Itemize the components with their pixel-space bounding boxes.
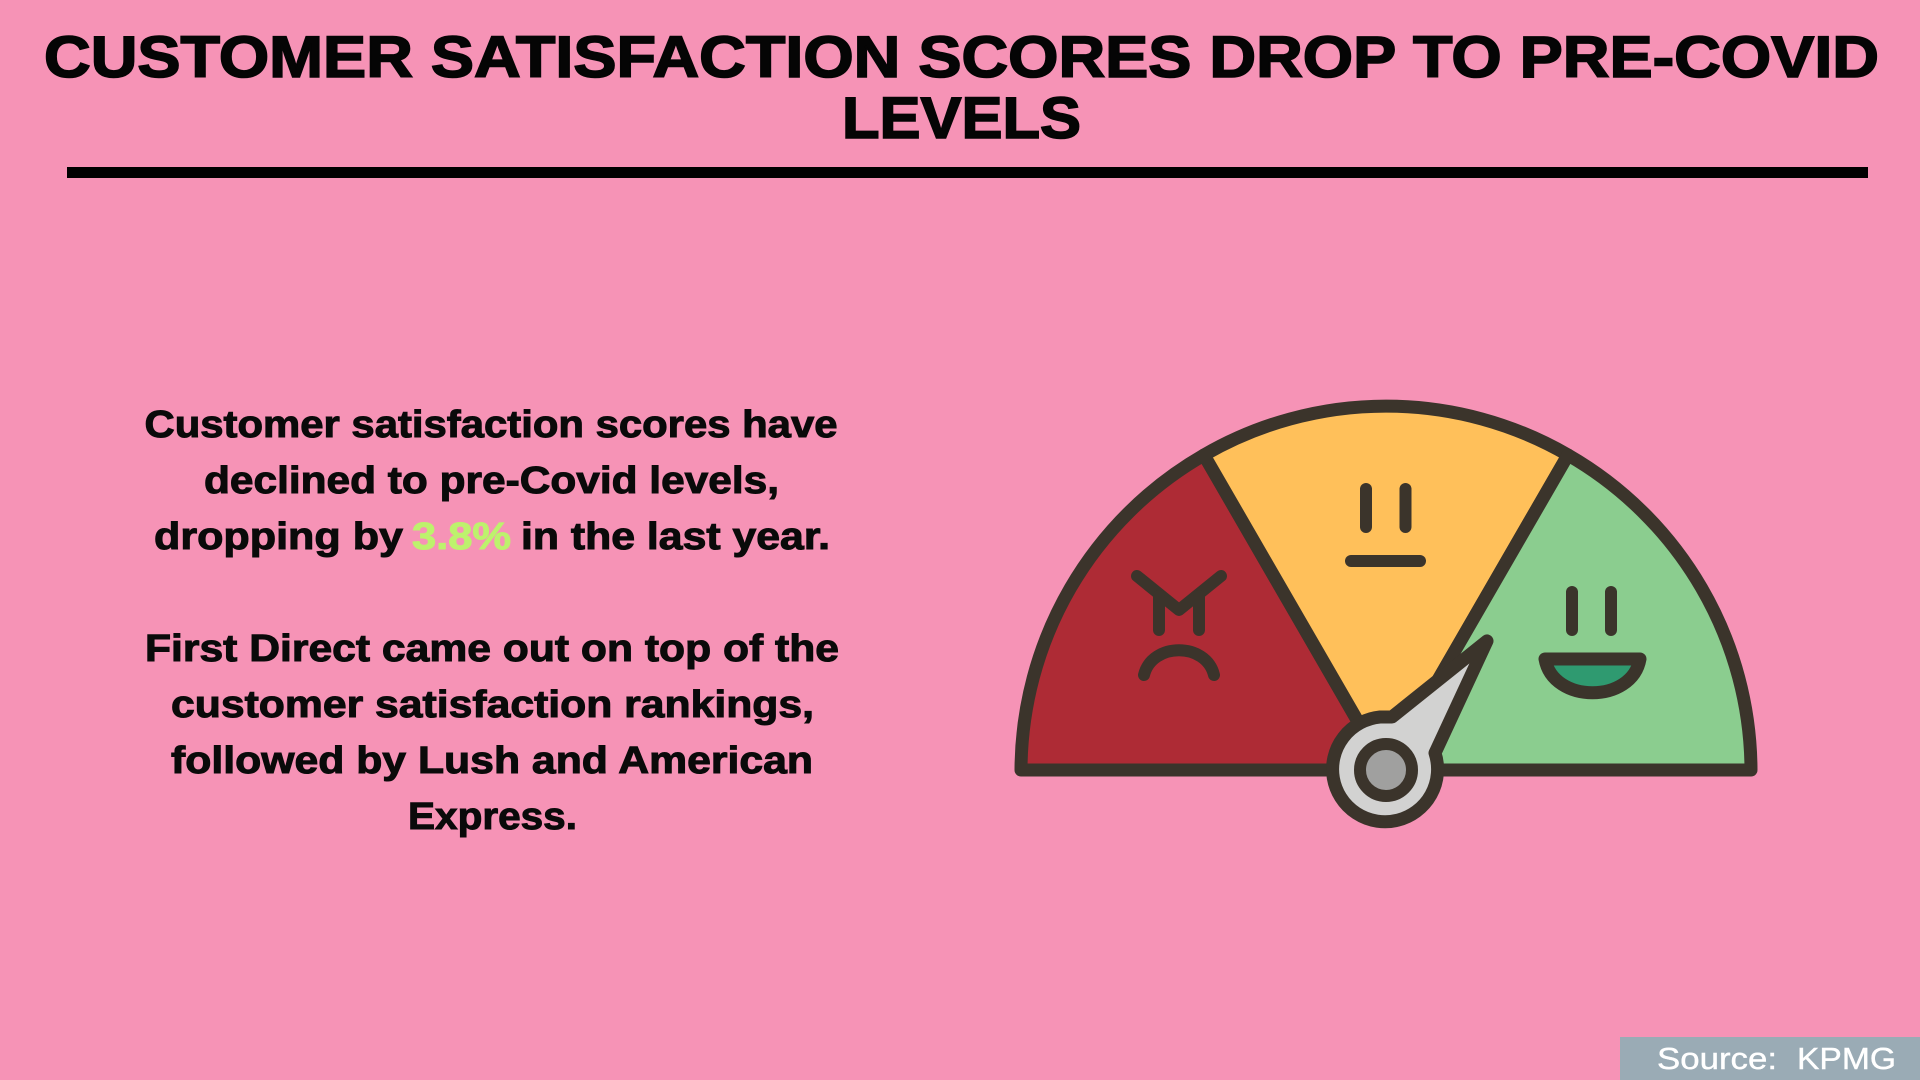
- gauge segment: green: [1386, 455, 1751, 770]
- gauge segment: red: [1021, 455, 1386, 770]
- source label: KPMG: [1797, 1041, 1896, 1076]
- text block: decline in scores: declined to pre-Covid levels,: [204, 460, 779, 502]
- text block: rankings: [145, 628, 839, 838]
- text block: rankings: customer satisfaction rankings,: [171, 684, 814, 726]
- text block: rankings: First Direct came out on top of the: [145, 628, 839, 670]
- neutral face: [1351, 489, 1420, 561]
- angry face: [1137, 576, 1221, 675]
- gauge segment: yellow: [1204, 406, 1568, 770]
- text block: decline in scores: dropping by: [154, 516, 403, 558]
- title underline: [67, 167, 1868, 178]
- text block: decline in scores: in the last year.: [521, 516, 830, 558]
- source label: [1620, 1037, 1920, 1080]
- text block: rankings: followed by Lush and American: [171, 740, 813, 782]
- text block: decline in scores: Customer satisfaction scores have: [144, 404, 837, 446]
- happy face: [1545, 592, 1640, 693]
- title: [44, 25, 1879, 151]
- text block: rankings: Express.: [408, 796, 577, 838]
- source label: Source:: [1657, 1041, 1777, 1076]
- text block: decline in scores: 3.8%: [412, 516, 511, 558]
- text block: decline in scores: [144, 404, 837, 558]
- title: LEVELS: [842, 86, 1081, 151]
- needle and hub: [1333, 641, 1487, 822]
- satisfaction gauge: [1021, 406, 1751, 822]
- title: CUSTOMER SATISFACTION SCORES DROP TO PRE-COVID: [44, 25, 1879, 90]
